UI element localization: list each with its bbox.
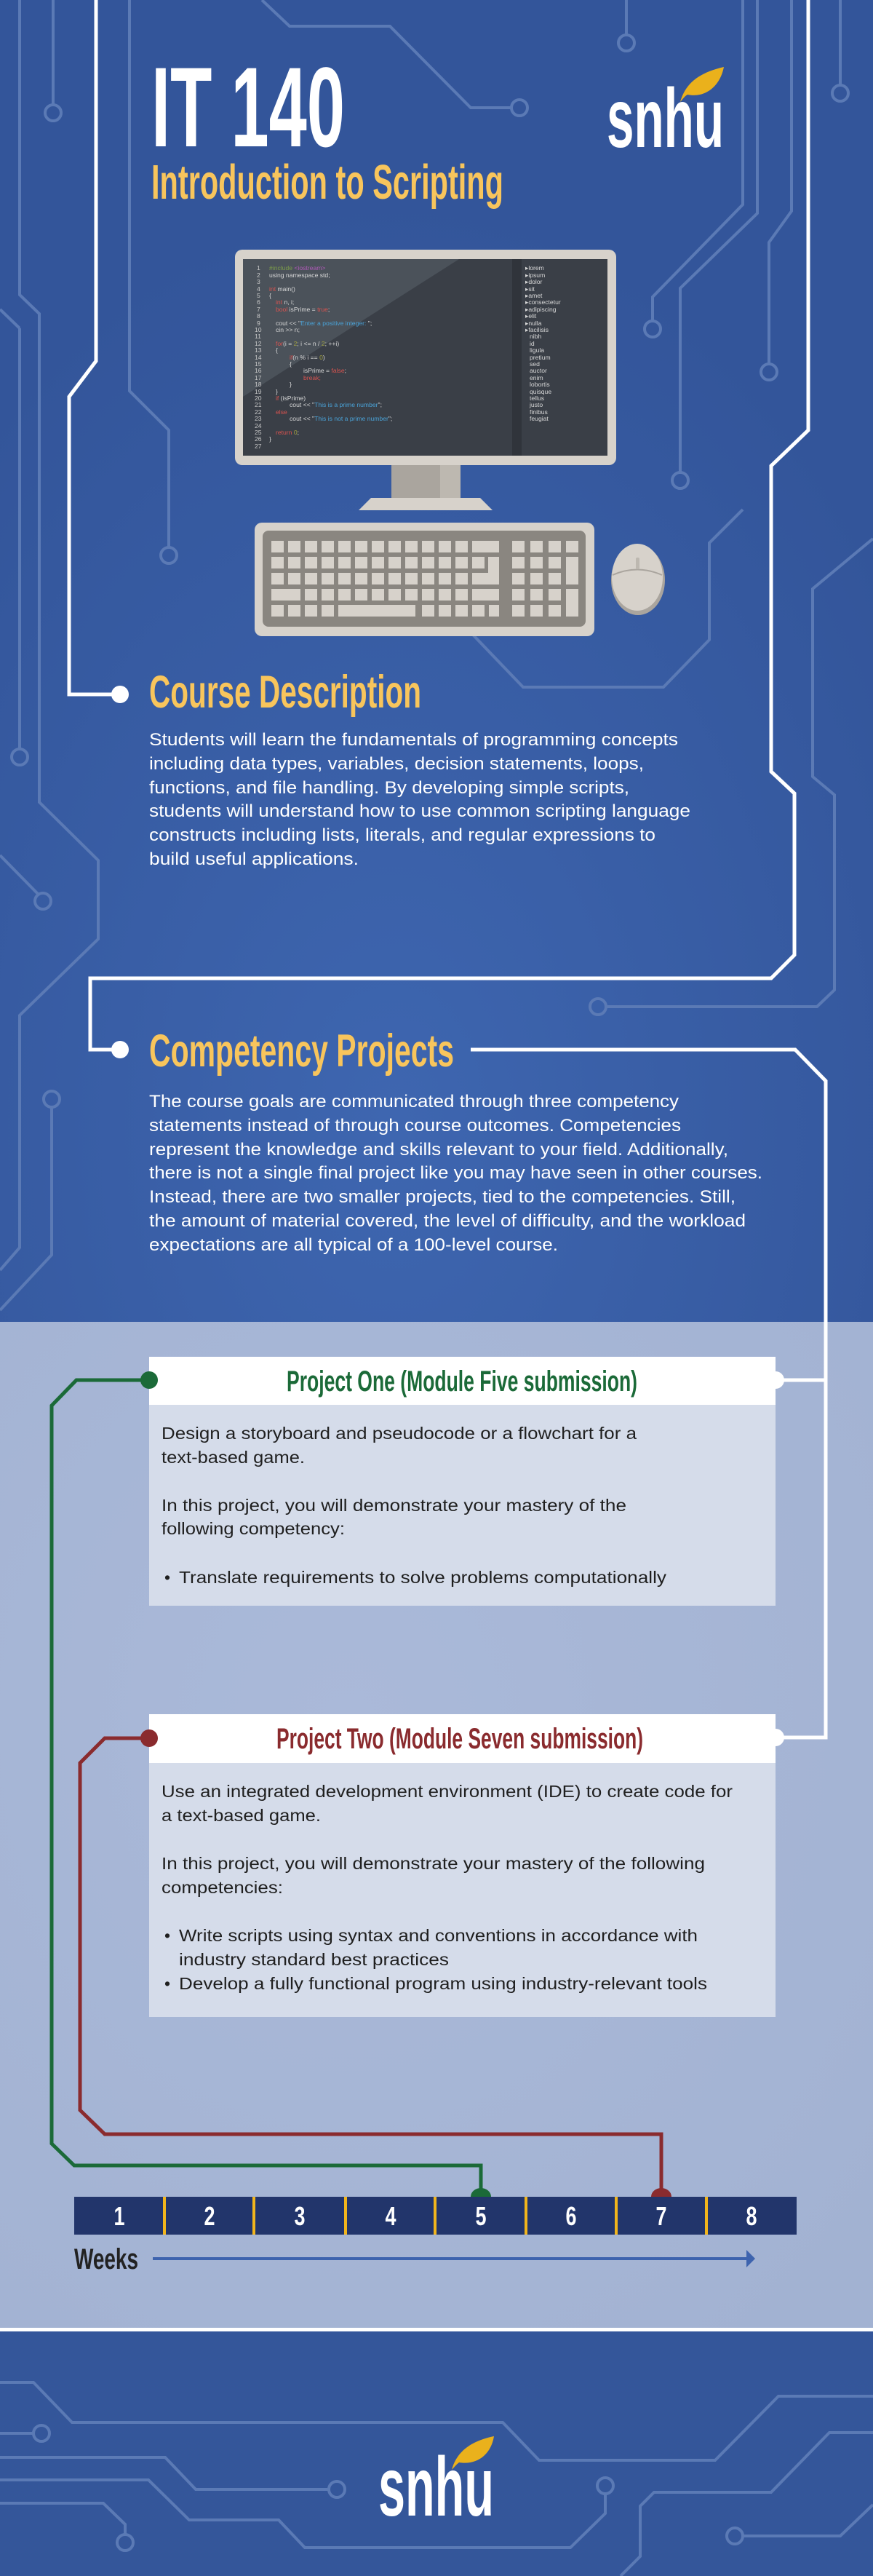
text: course description <box>149 730 690 869</box>
icon: computer monitor: 10 <box>255 326 262 333</box>
panel: project one: Project One (Module Five submission) <box>287 1366 637 1398</box>
heading: Competency Projects: Competency Projects <box>149 1026 454 1077</box>
text: competency projects: there is not a single final project like you may have seen in other courses. <box>149 1163 762 1183</box>
text: course description: functions, and file handling. By developing simple scripts, <box>149 778 629 798</box>
icon: computer monitor: ▸amet <box>525 292 543 299</box>
text: competency projects: the amount of material covered, the level of difficulty, and the workload <box>149 1211 746 1231</box>
icon: computer monitor: lobortis <box>530 381 550 388</box>
icon: computer monitor: 26 <box>255 435 262 443</box>
icon: computer monitor: 8 <box>257 312 260 320</box>
icon: computer monitor: bool isPrime = true; <box>276 306 330 313</box>
panel: project two: In this project, you will demonstrate your mastery of the following <box>162 1854 705 1873</box>
text: competency projects: expectations are all typical of a 100-level course. <box>149 1235 558 1255</box>
panel: project two: Develop a fully functional program using industry-relevant tools <box>179 1974 707 1993</box>
icon: computer monitor: quisque <box>530 388 551 395</box>
icon: computer monitor: ▸ipsum <box>525 272 545 279</box>
chart: week timeline: 6 <box>566 2201 576 2231</box>
icon: computer monitor: ▸dolor <box>525 278 543 285</box>
text: competency projects <box>149 1092 762 1255</box>
icon: computer monitor: justo <box>529 401 543 408</box>
icon: computer monitor: 24 <box>255 422 262 429</box>
chart: week timeline: 2 <box>204 2201 215 2231</box>
panel: project one: following competency: <box>162 1519 345 1538</box>
icon: computer monitor: 9 <box>257 320 260 327</box>
icon: computer monitor: isPrime = false; <box>303 367 346 374</box>
icon: computer monitor: finibus <box>530 408 548 416</box>
panel: project one: Translate requirements to solve problems computationally <box>179 1568 667 1587</box>
subtitle: Introduction to Scripting <box>151 155 503 210</box>
background: top section <box>0 0 873 1322</box>
heading: Competency Projects <box>111 1026 454 1077</box>
icon: computer monitor: cout << "This is a prime number"; <box>290 401 382 408</box>
icon: computer monitor: auctor <box>530 367 547 374</box>
icon: computer monitor: 11 <box>255 333 261 340</box>
icon: computer monitor: { <box>269 292 271 299</box>
icon: computer monitor: 18 <box>255 381 262 388</box>
arrow: weeks direction <box>153 2250 755 2267</box>
icon: computer monitor: enim <box>530 374 543 381</box>
icon: computer monitor <box>235 250 616 510</box>
icon: computer monitor: 14 <box>255 354 262 361</box>
logo: snhu header: snhu <box>607 72 724 165</box>
icon: computer monitor: 19 <box>255 388 262 395</box>
icon: computer monitor: 25 <box>255 429 262 436</box>
panel: project one: • <box>164 1568 170 1587</box>
text: competency projects: represent the knowledge and skills relevant to your field. Additionally, <box>149 1140 728 1160</box>
background: project section <box>0 1322 873 2328</box>
text: competency projects: statements instead of through course outcomes. Competencies <box>149 1116 681 1136</box>
chart: week timeline: 3 <box>294 2201 306 2231</box>
icon: computer monitor: } <box>276 388 278 395</box>
icon: computer monitor: { <box>276 346 278 354</box>
icon: computer monitor: break; <box>303 374 321 381</box>
icon: computer monitor: 15 <box>255 360 262 368</box>
icon: computer monitor: 5 <box>257 292 260 299</box>
connector: red timeline path <box>80 1729 671 2197</box>
panel: project one <box>149 1357 784 1606</box>
panel: project two: Use an integrated development environment (IDE) to create code for <box>162 1782 733 1801</box>
icon: computer monitor: cout << "Enter a positive integer: "; <box>276 320 372 327</box>
panel: project two: • <box>164 1974 170 1993</box>
icon: computer monitor: int n, i; <box>276 298 294 306</box>
icon: computer monitor: if (isPrime) <box>276 395 306 402</box>
panel: project one: Design a storyboard and pseudocode or a flowchart for a <box>162 1424 637 1443</box>
icon: computer monitor: 17 <box>255 374 262 381</box>
chart: week timeline <box>74 2197 797 2235</box>
icon: computer monitor: ▸nulla <box>525 320 542 327</box>
icon: computer monitor: for(i = 2; i <= n / 2; ++i) <box>276 340 339 347</box>
text: competency projects: The course goals are communicated through three competency <box>149 1092 679 1111</box>
text: course description: constructs including lists, literals, and regular expressions to <box>149 825 655 845</box>
icon: computer monitor: 12 <box>255 340 262 347</box>
icon: computer monitor: ▸sit <box>525 285 535 293</box>
panel: project one: text-based game. <box>162 1448 305 1467</box>
text: course description: including data types, variables, decision statements, loops, <box>149 754 644 774</box>
panel: project two: competencies: <box>162 1878 283 1897</box>
icon: computer monitor: using namespace std; <box>269 272 330 279</box>
chart: week timeline: 8 <box>746 2201 757 2231</box>
connector: white circuit path <box>69 0 826 1737</box>
icon: computer monitor: 16 <box>255 367 262 374</box>
icon: computer monitor: pretium <box>530 354 551 361</box>
icon: computer monitor: ▸facilisis <box>525 326 549 333</box>
icon: computer monitor: cout << "This is not a prime number"; <box>290 415 392 422</box>
icon: computer monitor: } <box>269 435 271 443</box>
label: weeks: Weeks <box>74 2243 138 2275</box>
icon: computer monitor: cin >> n; <box>276 326 300 333</box>
text: course description: Students will learn the fundamentals of programming concepts <box>149 730 678 750</box>
icon: computer monitor: nibh <box>530 333 541 340</box>
panel: project two: a text-based game. <box>162 1806 321 1825</box>
title: IT 140 <box>151 44 345 171</box>
logo: snhu header <box>607 67 724 165</box>
icon: computer monitor: 6 <box>257 298 260 306</box>
icon: computer monitor: 20 <box>255 395 262 402</box>
icon: computer monitor: 3 <box>257 278 260 285</box>
icon: computer monitor: if(n % i == 0) <box>290 354 325 361</box>
icon: computer monitor: ▸consectetur <box>525 298 561 306</box>
text: course description: build useful applications. <box>149 849 359 869</box>
icon: computer monitor: 1 <box>257 264 260 272</box>
chart: week timeline: 4 <box>386 2201 396 2231</box>
icon: keyboard <box>255 523 594 636</box>
icon: computer monitor: ▸lorem <box>525 264 544 272</box>
panel: project two: industry standard best practices <box>179 1950 449 1969</box>
icon: computer monitor: ▸adipiscing <box>525 306 557 313</box>
logo: snhu footer <box>378 2436 494 2534</box>
icon: computer monitor: 7 <box>257 306 260 313</box>
panel: project two: Write scripts using syntax and conventions in accordance with <box>179 1926 698 1945</box>
icon: computer monitor: return 0; <box>276 429 299 436</box>
icon: computer monitor: id <box>530 340 535 347</box>
icon: computer monitor: 27 <box>255 443 262 450</box>
icon: computer monitor: 23 <box>255 415 262 422</box>
heading: Course Description: Course Description <box>149 667 421 718</box>
background: footer <box>0 2331 873 2576</box>
icon: computer monitor: { <box>290 360 292 368</box>
icon: mouse <box>611 544 665 615</box>
icon: computer monitor: sed <box>530 360 540 368</box>
text: competency projects: Instead, there are two smaller projects, tied to the competencies. Still, <box>149 1187 736 1207</box>
connector: green timeline path <box>52 1371 491 2197</box>
panel: project two: • <box>164 1926 170 1945</box>
icon: computer monitor: 21 <box>255 401 262 408</box>
icon: computer monitor: ligula <box>530 346 544 354</box>
icon: computer monitor: tellus <box>530 395 544 402</box>
icon: computer monitor: feugiat <box>530 415 549 422</box>
icon: computer monitor: 13 <box>255 346 262 354</box>
chart: week timeline: 5 <box>476 2201 486 2231</box>
heading: Course Description <box>111 667 421 718</box>
icon: computer monitor: #include <iostream> <box>269 264 325 272</box>
text: course description: students will understand how to use common scripting language <box>149 801 690 821</box>
icon: computer monitor: 22 <box>255 408 262 416</box>
chart: week timeline: 7 <box>656 2201 666 2231</box>
panel: project two: Project Two (Module Seven submission) <box>276 1723 643 1755</box>
panel: project one: In this project, you will demonstrate your mastery of the <box>162 1496 626 1515</box>
panel: project two <box>149 1714 784 2017</box>
icon: computer monitor: int main() <box>269 285 295 293</box>
icon: computer monitor: else <box>276 408 287 416</box>
icon: computer monitor: } <box>290 381 292 388</box>
chart: week timeline: 1 <box>113 2201 125 2231</box>
icon: computer monitor: ▸elit <box>525 312 537 320</box>
icon: computer monitor: 4 <box>257 285 260 293</box>
icon: computer monitor: 2 <box>257 272 260 279</box>
logo: snhu footer: snhu <box>378 2441 494 2534</box>
